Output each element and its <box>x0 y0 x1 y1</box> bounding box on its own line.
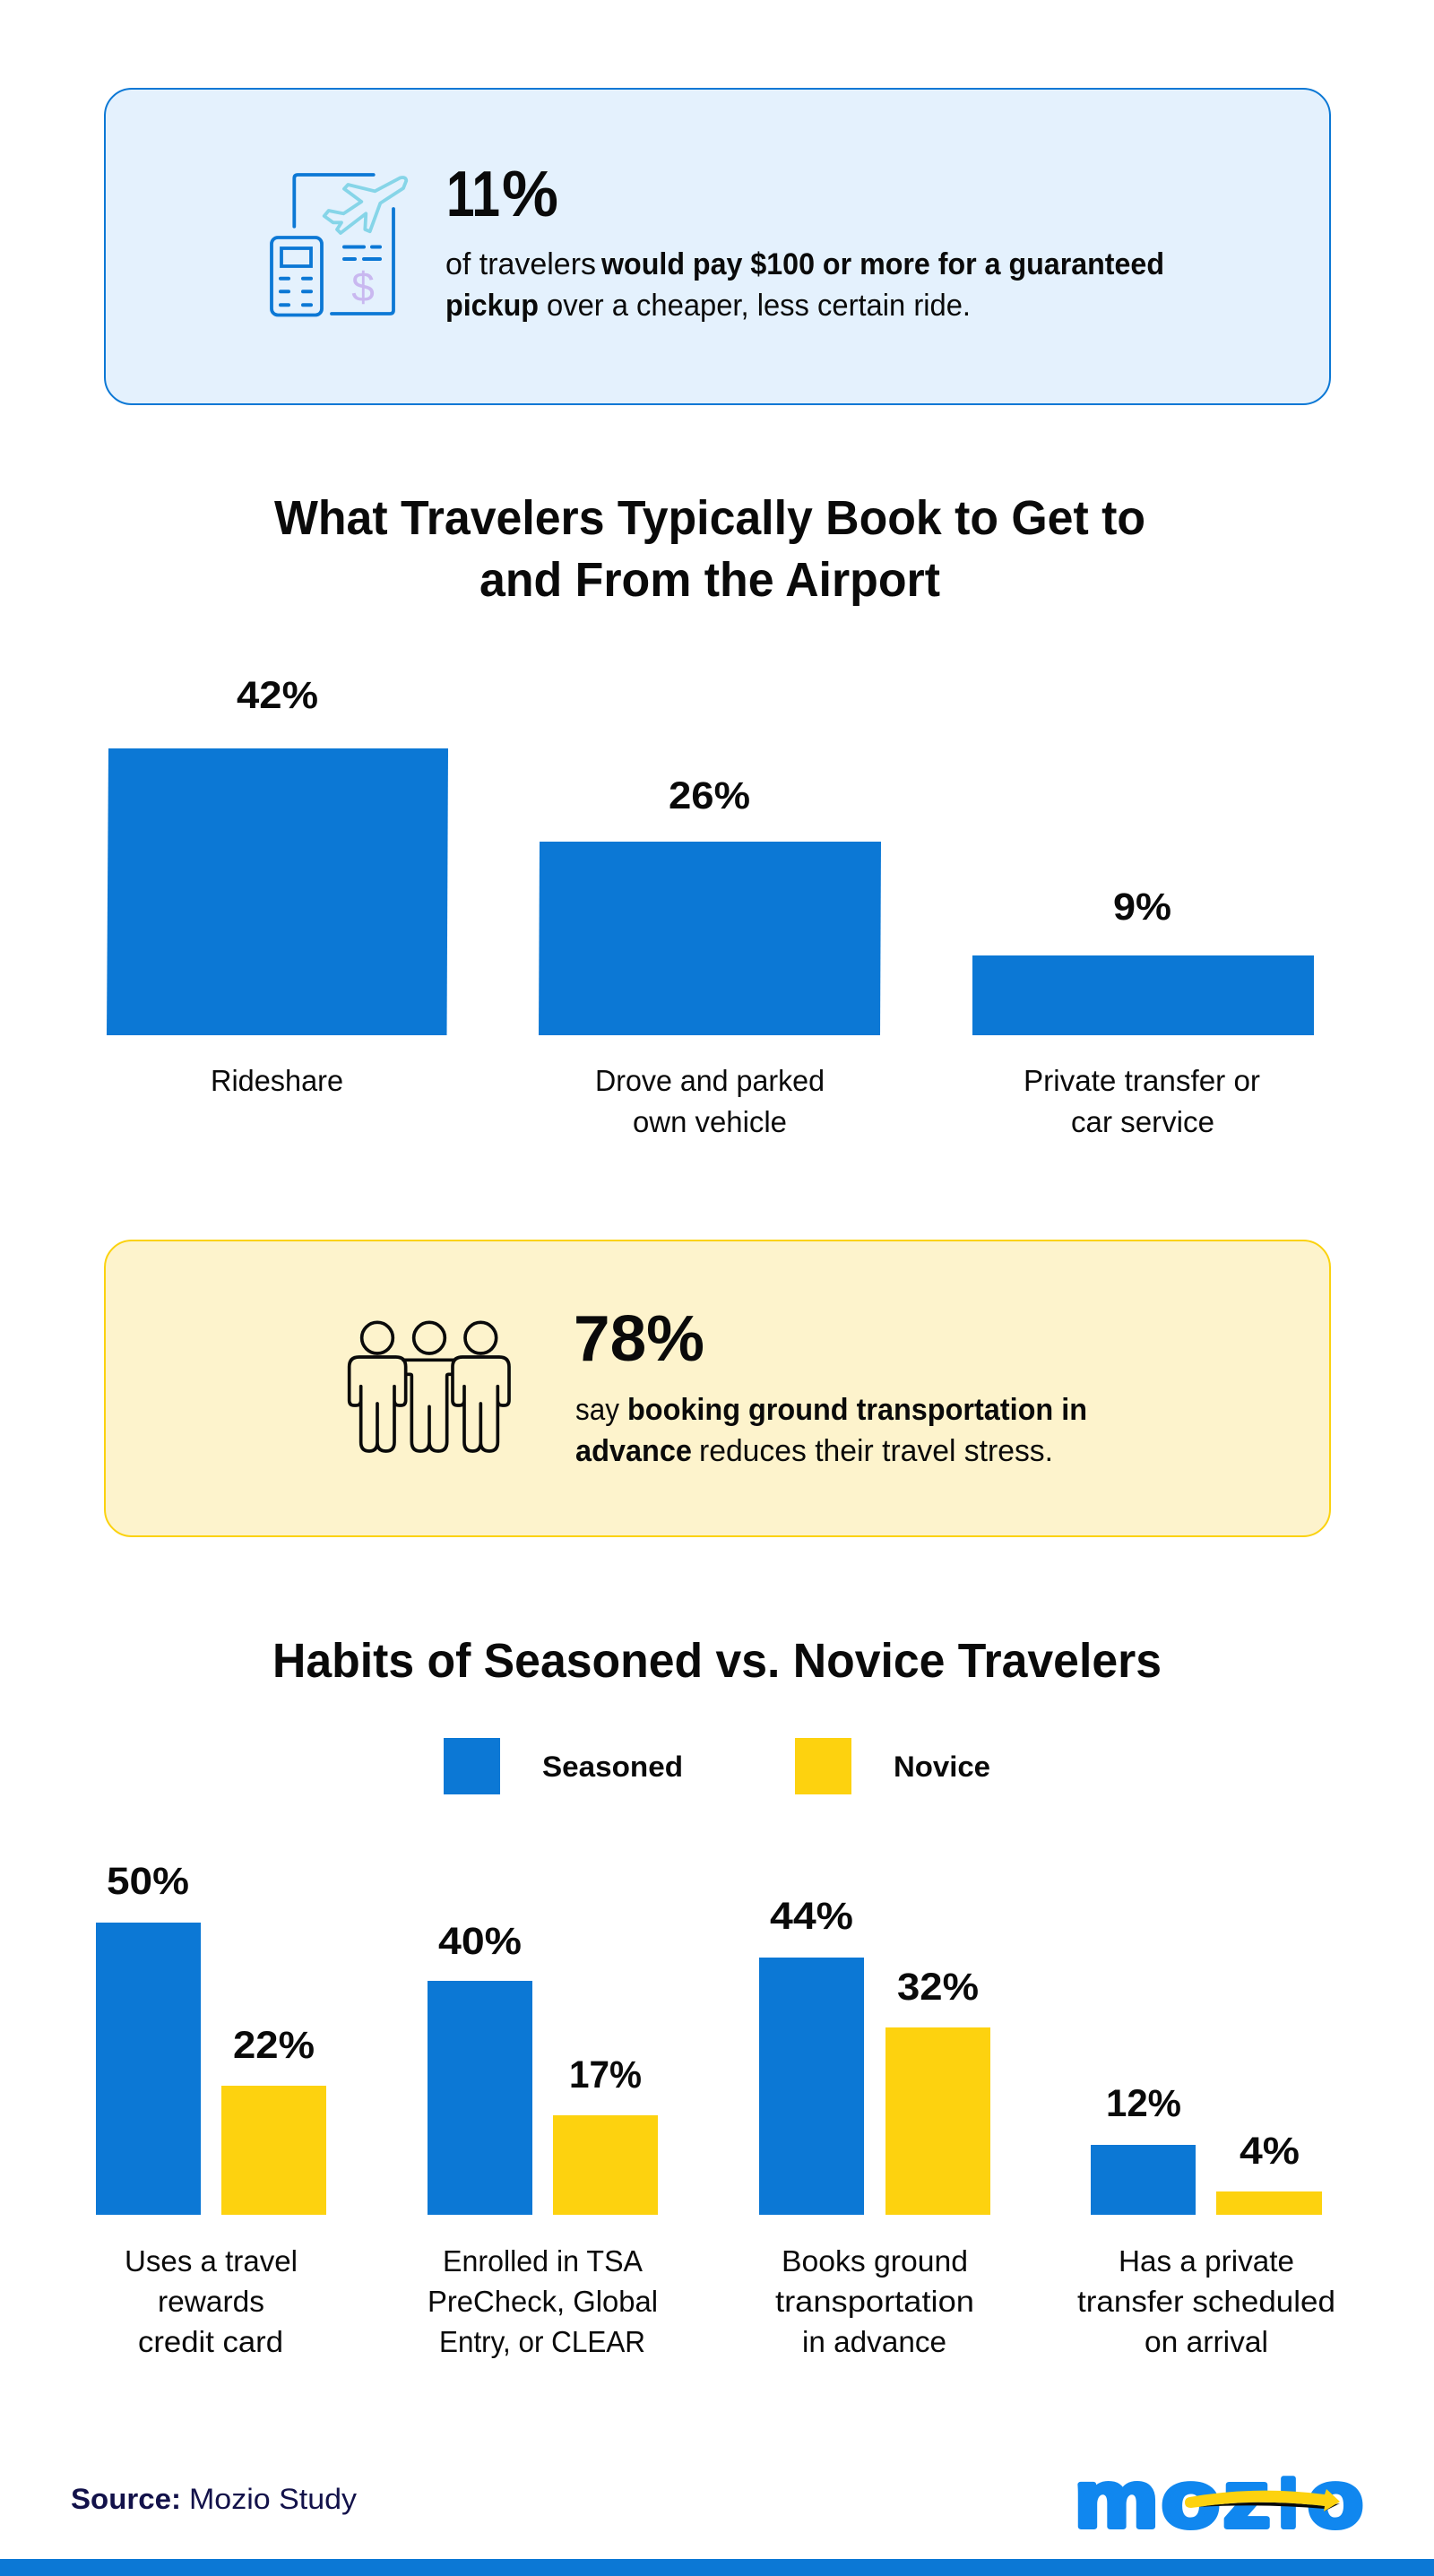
logo: mozio <box>1075 2454 1363 2544</box>
heading: habits of seasoned vs novice: Habits of Seasoned vs. Novice Travelers <box>272 1634 1162 1688</box>
group: private transfer scheduled on arrival: 12% <box>1106 2082 1181 2125</box>
group: travel rewards credit card <box>96 1860 326 2358</box>
group: travel rewards credit card: 22% <box>233 2024 315 2067</box>
bar chart: seasoned vs novice habits <box>96 1860 1335 2358</box>
icon: phone, receipt and airplane <box>272 175 406 316</box>
group: private transfer scheduled on arrival: transfer scheduled <box>1077 2285 1335 2318</box>
text: 78% description: say <box>575 1393 619 1427</box>
group: private transfer scheduled on arrival: on arrival <box>1145 2325 1268 2358</box>
source <box>71 2483 357 2515</box>
group: travel rewards credit card: 50% <box>107 1860 189 1903</box>
group: TSA PreCheck, Global Entry, CLEAR: Enrolled in TSA <box>443 2244 643 2278</box>
group: TSA PreCheck, Global Entry, CLEAR: 17% <box>569 2053 642 2096</box>
logo: mozio: I <box>1279 2463 1298 2542</box>
legend <box>444 1738 990 1794</box>
group: books ground transportation in advance: 44% <box>770 1895 853 1938</box>
bar: private transfer 9%: Private transfer or <box>1024 1064 1260 1097</box>
group: private transfer scheduled on arrival: 4% <box>1240 2130 1300 2173</box>
stat: 11% <box>446 159 558 230</box>
text: 78% description: reduces their travel stress. <box>699 1434 1053 1468</box>
bar: drove and parked 26% <box>539 774 881 1138</box>
logo: mozio: o <box>1308 2454 1363 2544</box>
group: books ground transportation in advance <box>759 1895 990 2358</box>
heading: what travelers book: What Travelers Typically Book to Get to <box>274 491 1145 545</box>
bar: private transfer 9%: 9% <box>1113 886 1171 929</box>
icon: three people <box>350 1322 509 1451</box>
group: TSA PreCheck, Global Entry, CLEAR: 40% <box>438 1920 522 1963</box>
group: TSA PreCheck, Global Entry, CLEAR <box>428 1920 658 2358</box>
stat: 11%: % <box>502 159 558 230</box>
bar: private transfer 9% <box>972 886 1314 1138</box>
legend: Seasoned <box>542 1750 683 1783</box>
group: books ground transportation in advance: transportation <box>775 2285 974 2318</box>
logo: mozio: o <box>1162 2454 1220 2544</box>
footer bar <box>0 2559 1434 2576</box>
stat: 78%: 78% <box>574 1303 704 1375</box>
bar chart: typical airport bookings <box>107 674 1314 1138</box>
bar: drove and parked 26%: Drove and parked <box>595 1064 825 1097</box>
text: 11% description: would pay $100 or more for a guaranteed <box>600 247 1164 281</box>
panel: 11% guaranteed pickup stat <box>105 89 1330 404</box>
bar: private transfer 9%: car service <box>1071 1105 1214 1138</box>
text: 78% description: booking ground transportation in <box>627 1393 1087 1427</box>
text: 11% description: over a cheaper, less certain ride. <box>547 289 971 323</box>
icon: phone, receipt and airplane: $ <box>351 264 375 310</box>
group: books ground transportation in advance: Books ground <box>782 2244 968 2278</box>
group: private transfer scheduled on arrival: Has a private <box>1119 2244 1294 2278</box>
group: private transfer scheduled on arrival <box>1077 2082 1335 2358</box>
group: books ground transportation in advance: in advance <box>802 2325 946 2358</box>
group: travel rewards credit card: credit card <box>138 2325 283 2358</box>
bar: rideshare 42% <box>107 674 448 1097</box>
group: TSA PreCheck, Global Entry, CLEAR: Entry, or CLEAR <box>439 2325 645 2358</box>
icon: yellow arrow <box>1185 2489 1340 2511</box>
group: TSA PreCheck, Global Entry, CLEAR: PreCheck, Global <box>428 2285 658 2318</box>
bar: drove and parked 26%: 26% <box>669 774 750 817</box>
bar: rideshare 42%: 42% <box>237 674 318 717</box>
panel: 78% reduced stress stat <box>105 1240 1330 1536</box>
stat: 11%: 11 <box>446 159 500 230</box>
heading: what travelers book: and From the Airport <box>479 553 940 607</box>
heading: what travelers book <box>274 491 1145 607</box>
text: 11% description: of travelers <box>445 247 596 281</box>
text: 78% description: advance <box>575 1434 692 1468</box>
legend: Novice <box>894 1750 990 1783</box>
group: travel rewards credit card: Uses a travel <box>125 2244 298 2278</box>
bar: drove and parked 26%: own vehicle <box>633 1105 787 1138</box>
text: 11% description: pickup <box>445 289 539 323</box>
group: travel rewards credit card: rewards <box>158 2285 264 2318</box>
source: Source: <box>71 2483 181 2515</box>
bar: rideshare 42%: Rideshare <box>211 1064 343 1097</box>
text: 11% description <box>445 247 1164 323</box>
logo: mozio: z <box>1223 2454 1270 2544</box>
text: 78% description <box>575 1393 1087 1468</box>
logo: mozio: m <box>1075 2454 1158 2544</box>
group: books ground transportation in advance: 32% <box>897 1966 979 2009</box>
source: Mozio Study <box>189 2483 357 2515</box>
